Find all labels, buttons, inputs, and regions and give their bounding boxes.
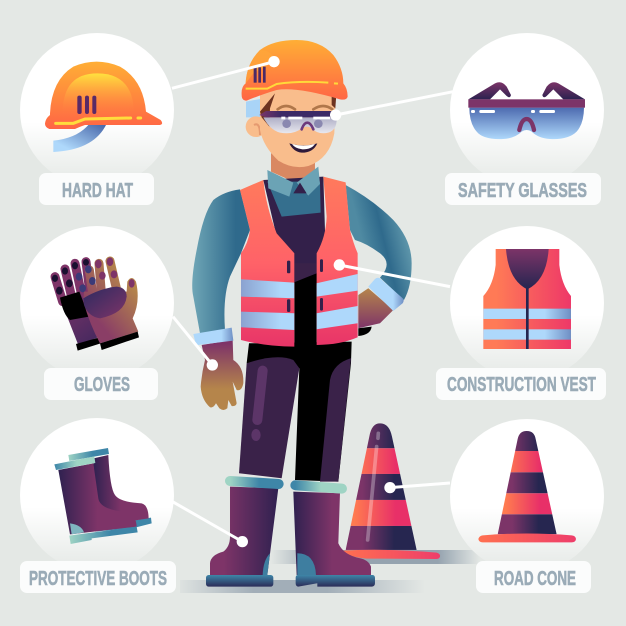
right hand and glove: [346, 185, 412, 336]
label: construction vest: [436, 368, 606, 400]
head: [246, 85, 337, 167]
panel: road cone: [450, 419, 604, 593]
pointer: hard hat: [172, 56, 280, 88]
label: hard hat: HARD HAT: [62, 180, 133, 202]
smile: [289, 143, 317, 153]
worker hard hat: [242, 40, 348, 101]
icon: road cone: [478, 428, 576, 542]
ground shadow under figure: [180, 580, 425, 593]
pointer: safety glasses: [330, 92, 453, 121]
left boot: [206, 481, 279, 587]
trousers: [239, 342, 352, 482]
icon: gloves: [52, 257, 139, 351]
left sleeve: [192, 189, 250, 333]
roadside cone beside worker: [343, 420, 440, 559]
right sleeve: [346, 185, 412, 300]
panel: safety glasses: [445, 33, 604, 205]
pointer: gloves: [173, 317, 218, 371]
right cuff: [368, 278, 404, 311]
panel: gloves: [20, 226, 174, 400]
ground shadow under cone: [270, 550, 480, 564]
right boot: [293, 485, 375, 587]
neck: [271, 153, 315, 182]
label: road cone: [476, 561, 591, 593]
pointer: boots: [173, 502, 248, 547]
left glove: [201, 340, 243, 410]
icon: safety glasses: [468, 82, 585, 139]
safety vest: [240, 177, 358, 347]
label: gloves: GLOVES: [74, 374, 130, 396]
face safety glasses: [259, 111, 337, 133]
icon: hard hat: [45, 62, 162, 152]
label: protective boots: [20, 561, 176, 593]
label: gloves: [44, 368, 158, 400]
icon: boots: [54, 448, 152, 544]
label: protective boots: PROTECTIVE BOOTS: [29, 568, 167, 590]
icon: vest: [483, 249, 571, 349]
panel: hard hat: [20, 33, 174, 205]
panel: construction vest: [436, 226, 606, 400]
label: safety glasses: [445, 173, 601, 205]
pointer: construction vest: [334, 259, 450, 287]
panel: protective boots: [20, 418, 176, 593]
label: hard hat: [39, 173, 154, 205]
label: road cone: ROAD CONE: [494, 568, 576, 590]
worker figure: [172, 40, 453, 587]
left cuff: [193, 328, 233, 345]
pointer: road cone: [384, 482, 450, 493]
shirt and bib: [263, 167, 327, 347]
